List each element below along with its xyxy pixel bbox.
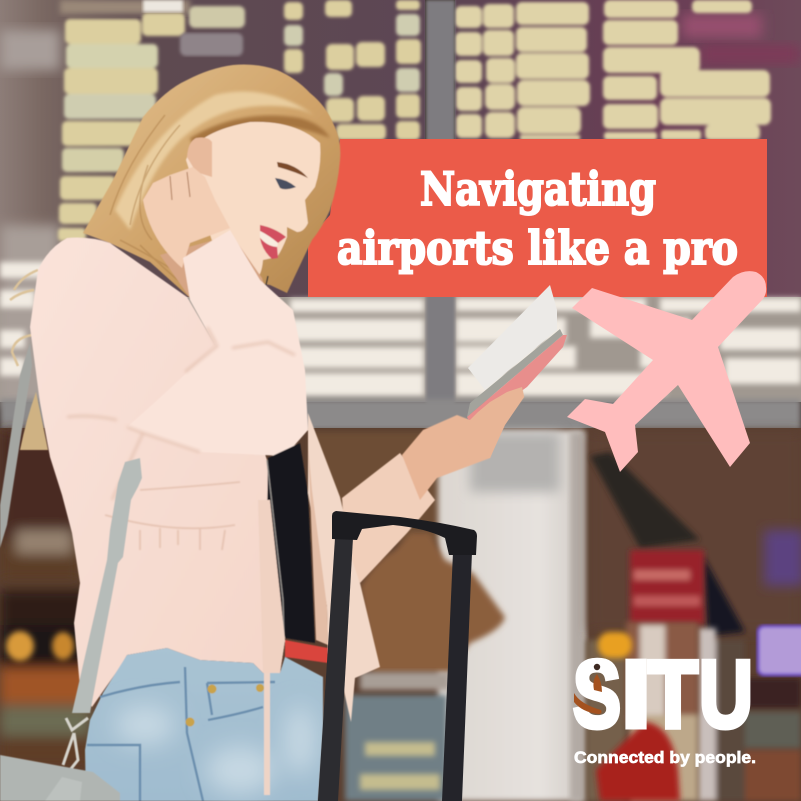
right wall xyxy=(590,432,801,632)
raised sleeve xyxy=(127,230,308,456)
red sign xyxy=(630,550,704,624)
right jacket panel xyxy=(308,413,380,722)
eye xyxy=(275,178,296,189)
left pole xyxy=(318,538,353,801)
eyebrow xyxy=(277,162,308,178)
metal clasp xyxy=(63,718,88,775)
statue plinth xyxy=(360,672,450,690)
grey sign xyxy=(345,695,447,801)
left hall tones xyxy=(0,430,90,768)
wordmark xyxy=(573,641,753,748)
necklace cord xyxy=(264,276,268,294)
statue xyxy=(360,533,505,673)
banner heading: airports like a pro xyxy=(337,221,738,275)
logo figure: swoosh xyxy=(574,674,602,714)
woman xyxy=(0,65,524,801)
wordmark: U xyxy=(699,641,753,748)
hair highlight xyxy=(115,92,318,230)
hand with passport xyxy=(402,387,524,500)
passport cover xyxy=(467,335,567,423)
wordmark: T xyxy=(648,641,698,748)
red belt xyxy=(285,640,328,663)
lower frame of board xyxy=(0,399,801,431)
forward sleeve xyxy=(342,453,435,583)
hair xyxy=(83,65,340,298)
hand at ear xyxy=(143,167,230,268)
SITU logo xyxy=(573,641,756,767)
suitcase handle xyxy=(318,511,477,801)
jacket hem over jeans xyxy=(258,500,285,673)
bag tab xyxy=(45,777,82,801)
passport-holding fingers xyxy=(455,387,524,460)
jeans fade patches xyxy=(115,705,316,794)
black top xyxy=(267,443,315,643)
grip xyxy=(332,511,477,555)
sign lettering xyxy=(360,742,440,790)
hair wisps behind shoulder xyxy=(10,270,38,366)
bag xyxy=(0,755,120,801)
hair dark strands xyxy=(190,116,330,150)
right pole xyxy=(442,552,472,801)
boarding pass paper xyxy=(468,285,557,390)
teeth xyxy=(260,231,278,247)
tagline: Connected by people. xyxy=(574,748,756,767)
white column xyxy=(438,430,584,801)
lower-right bands xyxy=(586,628,801,801)
knuckle lines xyxy=(170,172,190,200)
bag strap xyxy=(72,458,142,713)
icon: airplane xyxy=(567,271,766,472)
jeans xyxy=(85,648,323,801)
title banner xyxy=(308,139,767,297)
hair strands over shoulder xyxy=(110,115,180,282)
jacket gathering waist xyxy=(105,482,240,550)
jeans shadow stripes xyxy=(87,667,275,801)
orange light xyxy=(598,632,632,658)
amber flight rows, left board xyxy=(58,0,421,241)
brown wall behind sleeve xyxy=(310,432,450,542)
background: departures board xyxy=(0,0,801,431)
passport xyxy=(467,285,567,423)
jacket zipper xyxy=(267,460,284,640)
pale store front xyxy=(626,622,698,801)
sleeve folds xyxy=(67,327,295,500)
wordmark: I xyxy=(621,641,651,748)
neck xyxy=(160,235,268,298)
blurred person in red xyxy=(596,722,680,801)
central pillar xyxy=(426,0,455,405)
purple light xyxy=(758,626,801,675)
face xyxy=(186,122,320,285)
logo figure: head dot xyxy=(594,664,600,670)
white rows below banner xyxy=(0,262,801,396)
ear xyxy=(187,138,212,177)
jacket body xyxy=(30,238,285,707)
lips xyxy=(260,225,286,259)
inner panel xyxy=(308,445,328,645)
jacket drawstring xyxy=(264,668,270,795)
wordmark: S xyxy=(573,641,621,748)
background: terminal hall xyxy=(0,428,801,801)
second strap xyxy=(0,343,32,548)
passport pages xyxy=(467,329,563,417)
jeans rivets xyxy=(186,684,264,726)
lower hair xyxy=(20,392,48,450)
banner heading: Navigating xyxy=(420,162,656,216)
amber flight rows, right board xyxy=(455,0,771,140)
